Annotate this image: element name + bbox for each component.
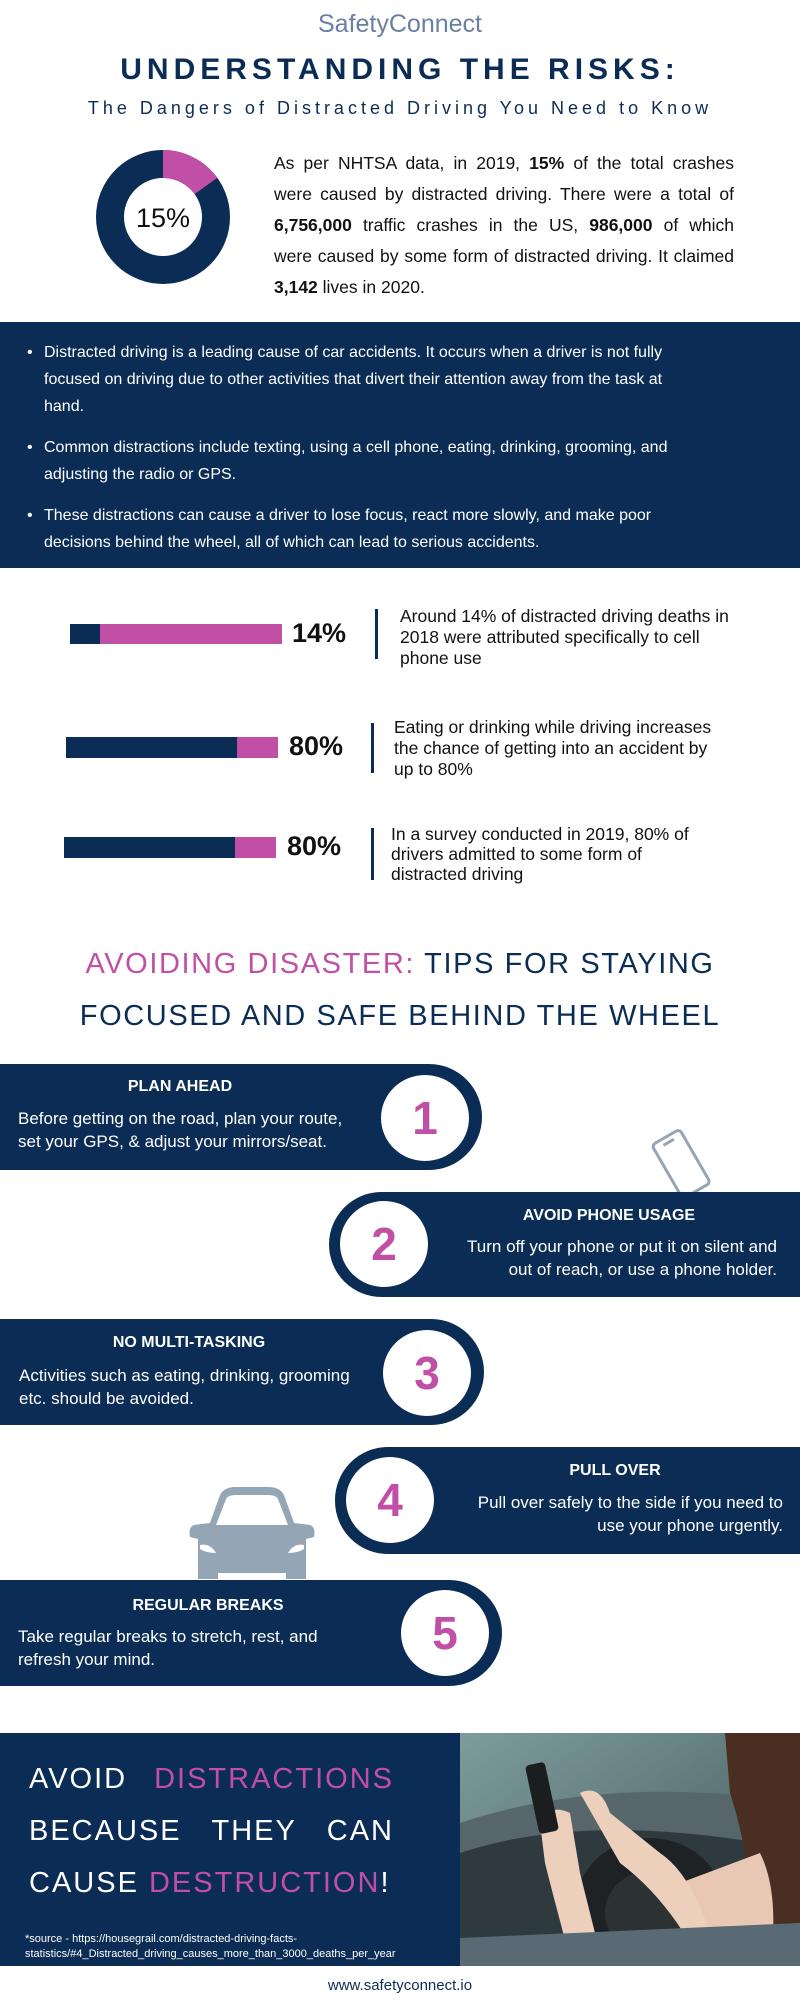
tip 2 [329, 1192, 800, 1297]
slogan: CAUSE DESTRUCTION! [29, 1867, 390, 1899]
number 4 [346, 1457, 434, 1543]
slogan [29, 1763, 394, 1899]
tip 4: Pull over safely to the side if you need to [478, 1493, 783, 1512]
number 2: 2 [371, 1218, 397, 1270]
title: UNDERSTANDING THE RISKS: [120, 53, 680, 86]
source note [25, 1933, 396, 1960]
tip 5: Take regular breaks to stretch, rest, and [18, 1627, 318, 1646]
tip 1 [0, 1064, 482, 1170]
tips heading: AVOIDING DISASTER: TIPS FOR STAYING [85, 948, 715, 980]
slogan: AVOID [29, 1763, 127, 1795]
stat 1: 2018 were attributed specifically to cell [400, 627, 700, 647]
intro paragraph: 6,756,000 traffic crashes in the US, 986,000 of which [274, 215, 734, 235]
tip 3 [0, 1319, 484, 1425]
bullet 1: focused on driving due to other activities that divert their attention away from the task at [44, 371, 662, 388]
number 5: 5 [432, 1607, 458, 1659]
tip 5: REGULAR BREAKS [132, 1597, 284, 1614]
stat 1: 14% [292, 618, 346, 648]
stat 3: drivers admitted to some form of [391, 844, 642, 864]
bullet 2 [25, 434, 667, 488]
tip 3: Activities such as eating, drinking, grooming [19, 1366, 350, 1385]
icon: car [190, 1487, 314, 1579]
tip 4 [335, 1447, 800, 1554]
slogan: CAN [327, 1815, 394, 1847]
bullet 2: Common distractions include texting, using a cell phone, eating, drinking, grooming, and [44, 439, 667, 456]
slogan: BECAUSE [29, 1815, 182, 1847]
stat 1: Around 14% of distracted driving deaths in [400, 606, 729, 626]
tip 5 [0, 1580, 502, 1686]
stat 3: 80% [287, 831, 341, 861]
donut chart [96, 150, 230, 284]
tip 1: PLAN AHEAD [128, 1078, 232, 1095]
source note: statistics/#4_Distracted_driving_causes_more_than_3000_deaths_per_year [25, 1948, 396, 1960]
bullet 3 [25, 502, 651, 556]
panel: closing message [0, 1733, 460, 1966]
bullet 1: hand. [44, 398, 84, 415]
bar 3 [64, 837, 276, 858]
tip 4: PULL OVER [569, 1462, 661, 1479]
panel: facts bullets [0, 322, 800, 568]
bullet 3: These distractions can cause a driver to lose focus, react more slowly, and make poor [44, 507, 651, 524]
tip 2: Turn off your phone or put it on silent and [467, 1237, 777, 1256]
subtitle: The Dangers of Distracted Driving You Need to Know [88, 98, 712, 118]
stat 2: the chance of getting into an accident by [394, 738, 707, 758]
bar 1 [70, 624, 282, 644]
tip 5: refresh your mind. [18, 1650, 155, 1669]
tip 2: out of reach, or use a phone holder. [509, 1260, 777, 1279]
tip 4: use your phone urgently. [597, 1516, 783, 1535]
tip 3: NO MULTI-TASKING [113, 1334, 265, 1351]
bar 2 [66, 737, 278, 758]
stat 1 [70, 606, 729, 668]
number 5 [401, 1590, 489, 1676]
tip 3: etc. should be avoided. [19, 1389, 194, 1408]
source note: *source - https://housegrail.com/distracted-driving-facts- [25, 1933, 297, 1945]
number 4: 4 [377, 1474, 403, 1526]
intro paragraph [274, 153, 734, 297]
photo: driver texting [460, 1733, 800, 1966]
tips heading [80, 948, 720, 1032]
tip 2: AVOID PHONE USAGE [523, 1207, 695, 1224]
stat 3: In a survey conducted in 2019, 80% of [391, 824, 689, 844]
number 2 [340, 1201, 428, 1287]
footer url: www.safetyconnect.io [328, 1977, 472, 1994]
bullet 2: adjusting the radio or GPS. [44, 466, 236, 483]
intro paragraph: were caused by distracted driving. There were a total of [274, 184, 734, 204]
bullet 1 [25, 339, 662, 420]
tips heading: FOCUSED AND SAFE BEHIND THE WHEEL [80, 1000, 720, 1032]
slogan: DISTRACTIONS [154, 1763, 394, 1795]
number 1: 1 [412, 1092, 438, 1144]
number 3 [383, 1330, 471, 1416]
stat 2: 80% [289, 731, 343, 761]
stat 3: distracted driving [391, 864, 523, 884]
bullet 3: decisions behind the wheel, all of which can lead to serious accidents. [44, 534, 539, 551]
stat 2: up to 80% [394, 759, 473, 779]
icon: phone [652, 1129, 710, 1192]
number 3: 3 [414, 1347, 440, 1399]
bullet 1: Distracted driving is a leading cause of car accidents. It occurs when a driver is not fully [44, 344, 662, 361]
tip 1: Before getting on the road, plan your route, [18, 1109, 342, 1128]
slogan: THEY [212, 1815, 297, 1847]
number 1 [381, 1075, 469, 1161]
logo: SafetyConnect [318, 10, 482, 38]
tip 1: set your GPS, & adjust your mirrors/seat. [18, 1132, 327, 1151]
stat 2: Eating or drinking while driving increases [394, 717, 711, 737]
intro paragraph: were caused by some form of distracted driving. It claimed [274, 246, 734, 266]
intro paragraph: 3,142 lives in 2020. [274, 277, 425, 297]
stat 2 [66, 717, 711, 779]
donut chart: 15% [136, 203, 190, 233]
stat 3 [64, 824, 689, 884]
intro paragraph: As per NHTSA data, in 2019, 15% of the total crashes [274, 153, 734, 173]
stat 1: phone use [400, 648, 482, 668]
